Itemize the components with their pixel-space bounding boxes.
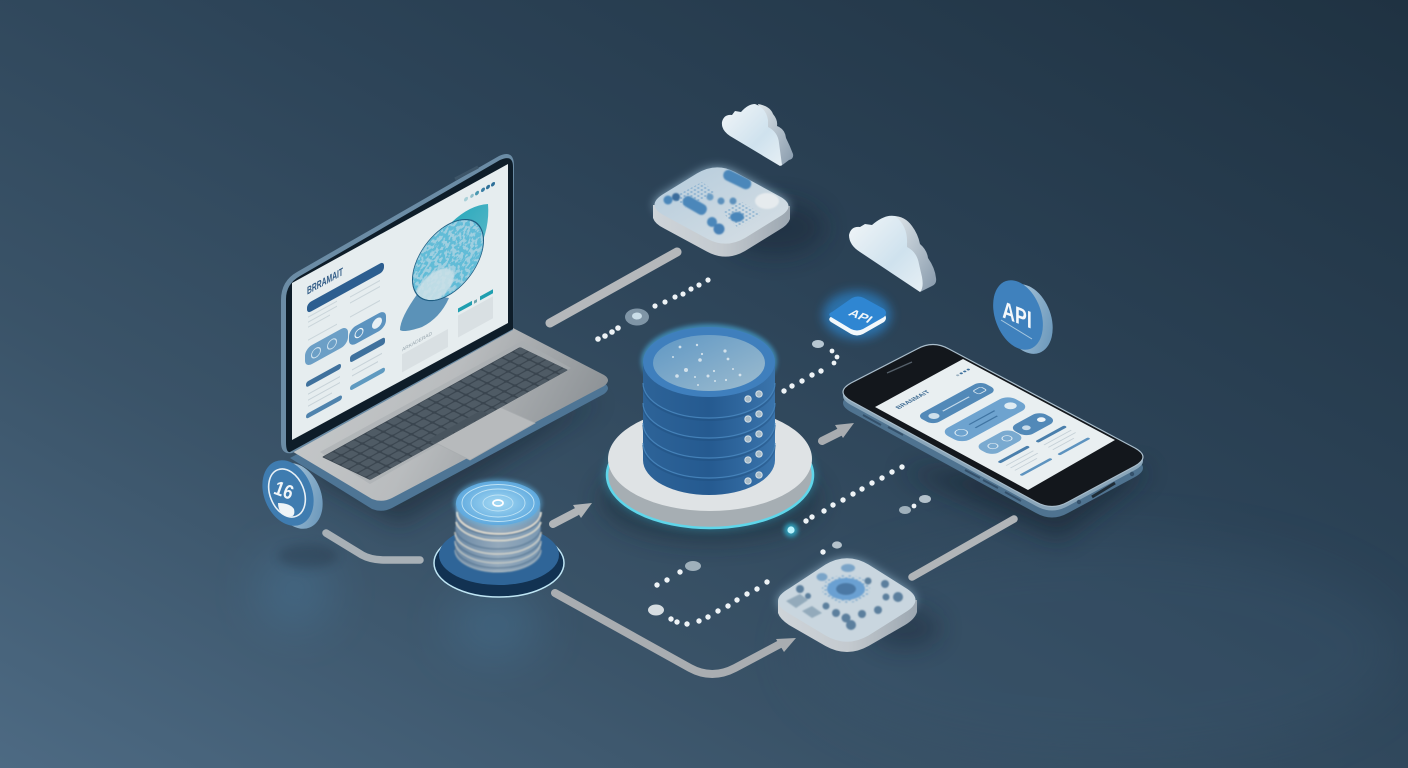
panel: central database: [600, 324, 820, 542]
chip components: [664, 168, 779, 234]
card one: [916, 381, 997, 425]
pill buttons: [305, 304, 386, 372]
screen swoosh: teal: [452, 204, 488, 252]
globe: [412, 219, 484, 302]
icon: API tile: [823, 291, 891, 339]
screen title: BRRAMAIT: [307, 264, 343, 298]
connector: lower chip to phone: [912, 519, 1014, 577]
laptop base: [290, 328, 608, 511]
icon: cloud small: [722, 104, 793, 166]
phone title: BRANMAIT: [894, 390, 932, 410]
header bar: [307, 261, 384, 314]
chip: lower module: [778, 558, 940, 652]
platform: [600, 407, 820, 542]
database body: [641, 324, 777, 495]
icon: number coin 16: [253, 452, 338, 568]
arrow: database to phone: [822, 423, 854, 441]
icon: API coin: [984, 273, 1062, 361]
earpiece: [887, 362, 912, 373]
connector: top bar: [550, 252, 677, 323]
arrow: disk to database: [553, 503, 592, 524]
status lights: [745, 391, 762, 484]
card three: [974, 411, 1057, 456]
list rows: [996, 425, 1091, 476]
card two: [940, 395, 1030, 444]
phone face: [843, 344, 1143, 506]
disk stack: [455, 503, 541, 572]
phone body: [843, 356, 1143, 518]
icon: cloud large: [849, 216, 936, 292]
phone interface: [894, 367, 1094, 476]
panel: smartphone: [843, 344, 1150, 540]
screen swoosh: blue: [400, 293, 449, 331]
icon: small stacked disk: [434, 479, 564, 597]
text block: ARKADERAD: [402, 331, 432, 353]
text block: [402, 289, 493, 372]
disk top: [454, 479, 542, 527]
screen interface: [305, 181, 495, 426]
icon: API tile: API: [846, 307, 875, 325]
dotted link: glow node to phone: [784, 464, 931, 537]
connector: curved path from coin: [326, 533, 420, 560]
trackpad: [430, 404, 535, 460]
data sparkles: [672, 344, 741, 386]
laptop shadow: [300, 400, 600, 525]
lower bars: [306, 337, 385, 419]
phone buttons and speaker: [863, 415, 1133, 503]
database surface: [653, 335, 765, 391]
disk base: [434, 525, 564, 597]
phone shadow: [900, 470, 1150, 540]
phone screen: [875, 359, 1115, 490]
panel: laptop: [281, 154, 608, 525]
icon: API coin: API: [1002, 296, 1032, 335]
dotted link: lower loop: [648, 541, 842, 627]
laptop lid: [281, 154, 514, 453]
dotted link: database to phone: [781, 340, 839, 394]
database top: [643, 327, 775, 397]
chip components: [786, 564, 903, 630]
arrow: disk to lower chip: [555, 593, 796, 674]
laptop screen: [292, 164, 508, 440]
chip: top module: [653, 167, 825, 257]
keyboard: [322, 347, 568, 480]
window dots: [464, 181, 495, 202]
status dots: [955, 368, 971, 377]
icon: number coin 16: 16: [271, 477, 296, 505]
dotted link: laptop to top chip: [595, 277, 711, 342]
text lines left: [308, 278, 380, 340]
